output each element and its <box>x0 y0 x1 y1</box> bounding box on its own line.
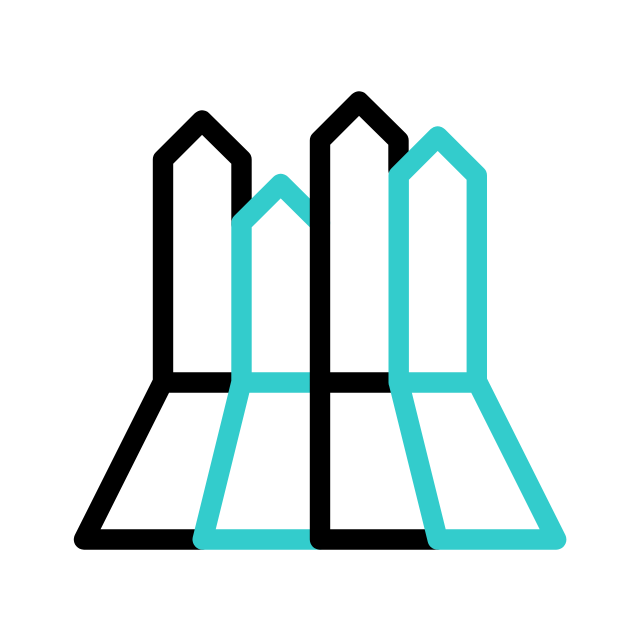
icon: black tower left <box>84 120 242 540</box>
icon: teal tower right <box>399 136 556 540</box>
icon: black tower third <box>320 102 438 540</box>
icon: teal tower second <box>203 184 320 540</box>
